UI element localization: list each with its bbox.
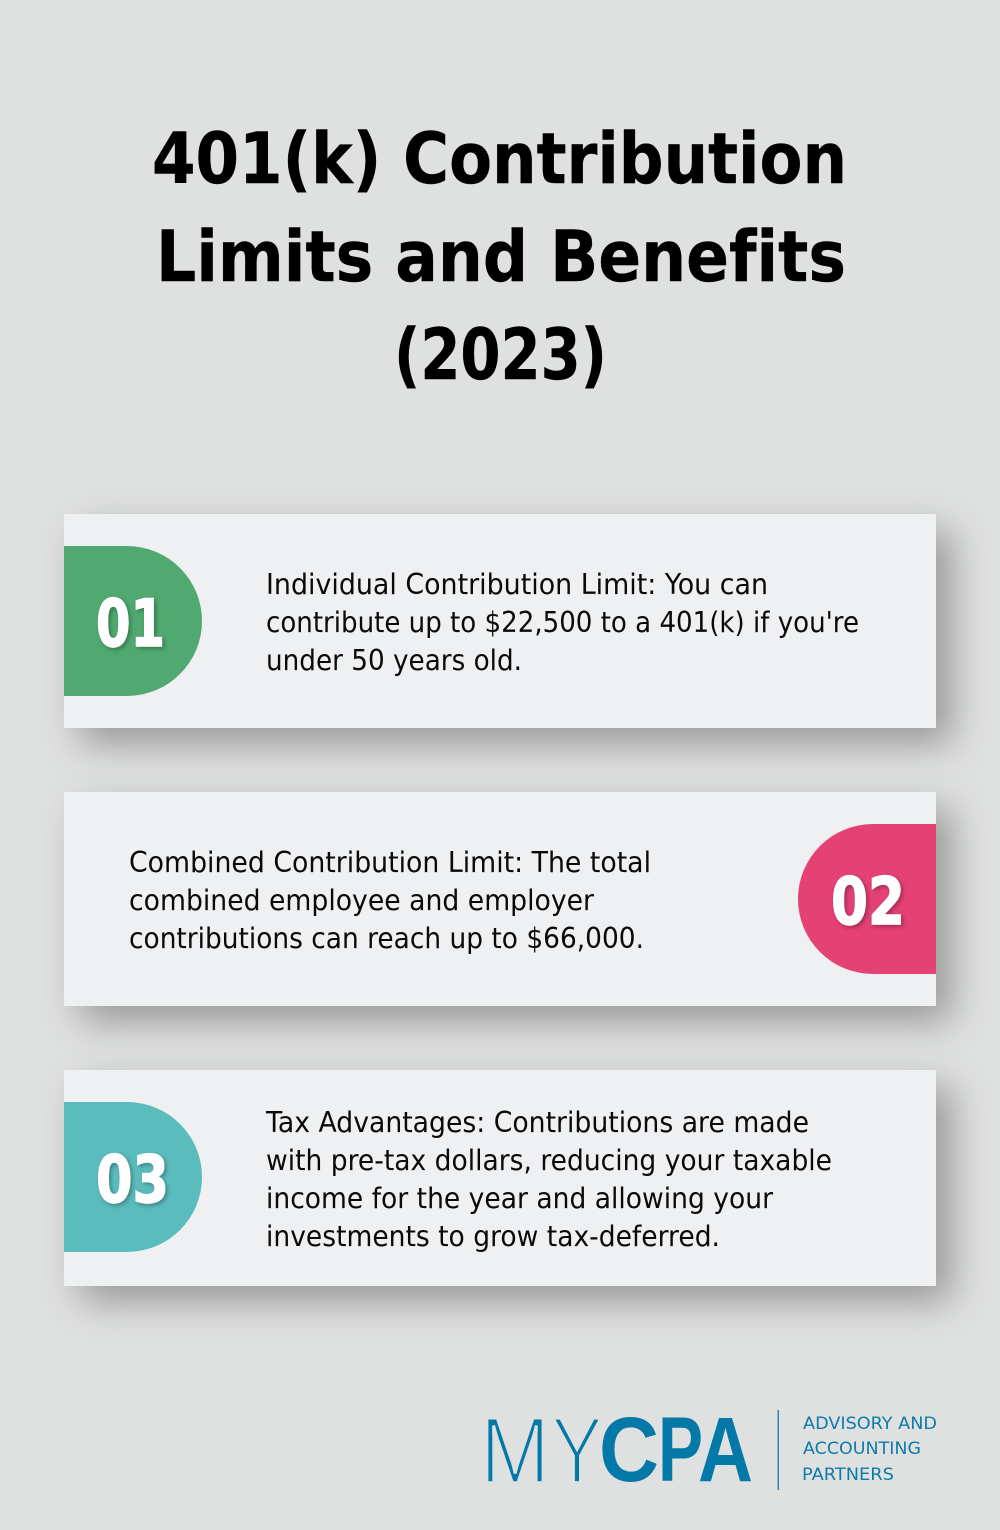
text: individual contribution limit: contribute up to $22,500 to a 401(k) if you're [266,606,859,639]
logo tagline [802,1414,937,1485]
text: combined contribution limit: Combined Contribution Limit: The total [129,846,651,879]
badge: 02 [798,824,936,974]
logo wordmark: MYCPA [480,1398,753,1504]
title: Limits and Benefits [156,216,846,298]
badge: 01 [64,546,202,696]
logo tagline: PARTNERS [802,1465,894,1485]
text: tax advantages: with pre-tax dollars, reducing your taxable [266,1144,832,1177]
logo wordmark: MYCPA: P [658,1399,703,1501]
panel: combined contribution limit [64,792,936,1006]
panel: individual contribution limit [64,514,936,728]
text: tax advantages: investments to grow tax-deferred. [266,1220,720,1253]
text: combined contribution limit [129,846,651,955]
logo: MYCPA advisory and accounting partners [480,1398,937,1504]
badge: 01: 01 [96,587,165,662]
text: tax advantages [265,1106,832,1253]
title: (2023) [394,314,607,396]
logo tagline: ADVISORY AND [803,1414,937,1434]
badge: 02: 02 [831,865,905,940]
logo wordmark: MYCPA: A [698,1399,753,1501]
logo wordmark: MYCPA: Y [551,1398,603,1504]
title [152,118,847,396]
logo wordmark: MYCPA: C [599,1399,659,1501]
text: individual contribution limit [266,568,859,677]
text: individual contribution limit: Individual Contribution Limit: You can [266,568,768,601]
badge: 03: 03 [96,1143,169,1218]
text: combined contribution limit: combined employee and employer [129,884,594,917]
text: tax advantages: income for the year and allowing your [266,1182,773,1215]
text: combined contribution limit: contributions can reach up to $66,000. [129,922,644,955]
panel: tax advantages [64,1070,936,1286]
text: individual contribution limit: under 50 years old. [266,644,522,677]
logo wordmark: MYCPA: M [480,1398,550,1504]
title: 401(k) Contribution [152,118,847,200]
logo divider [778,1410,779,1490]
text: tax advantages: Tax Advantages: Contributions are made [265,1106,809,1139]
badge: 03 [64,1102,202,1252]
logo tagline: ACCOUNTING [803,1439,921,1459]
